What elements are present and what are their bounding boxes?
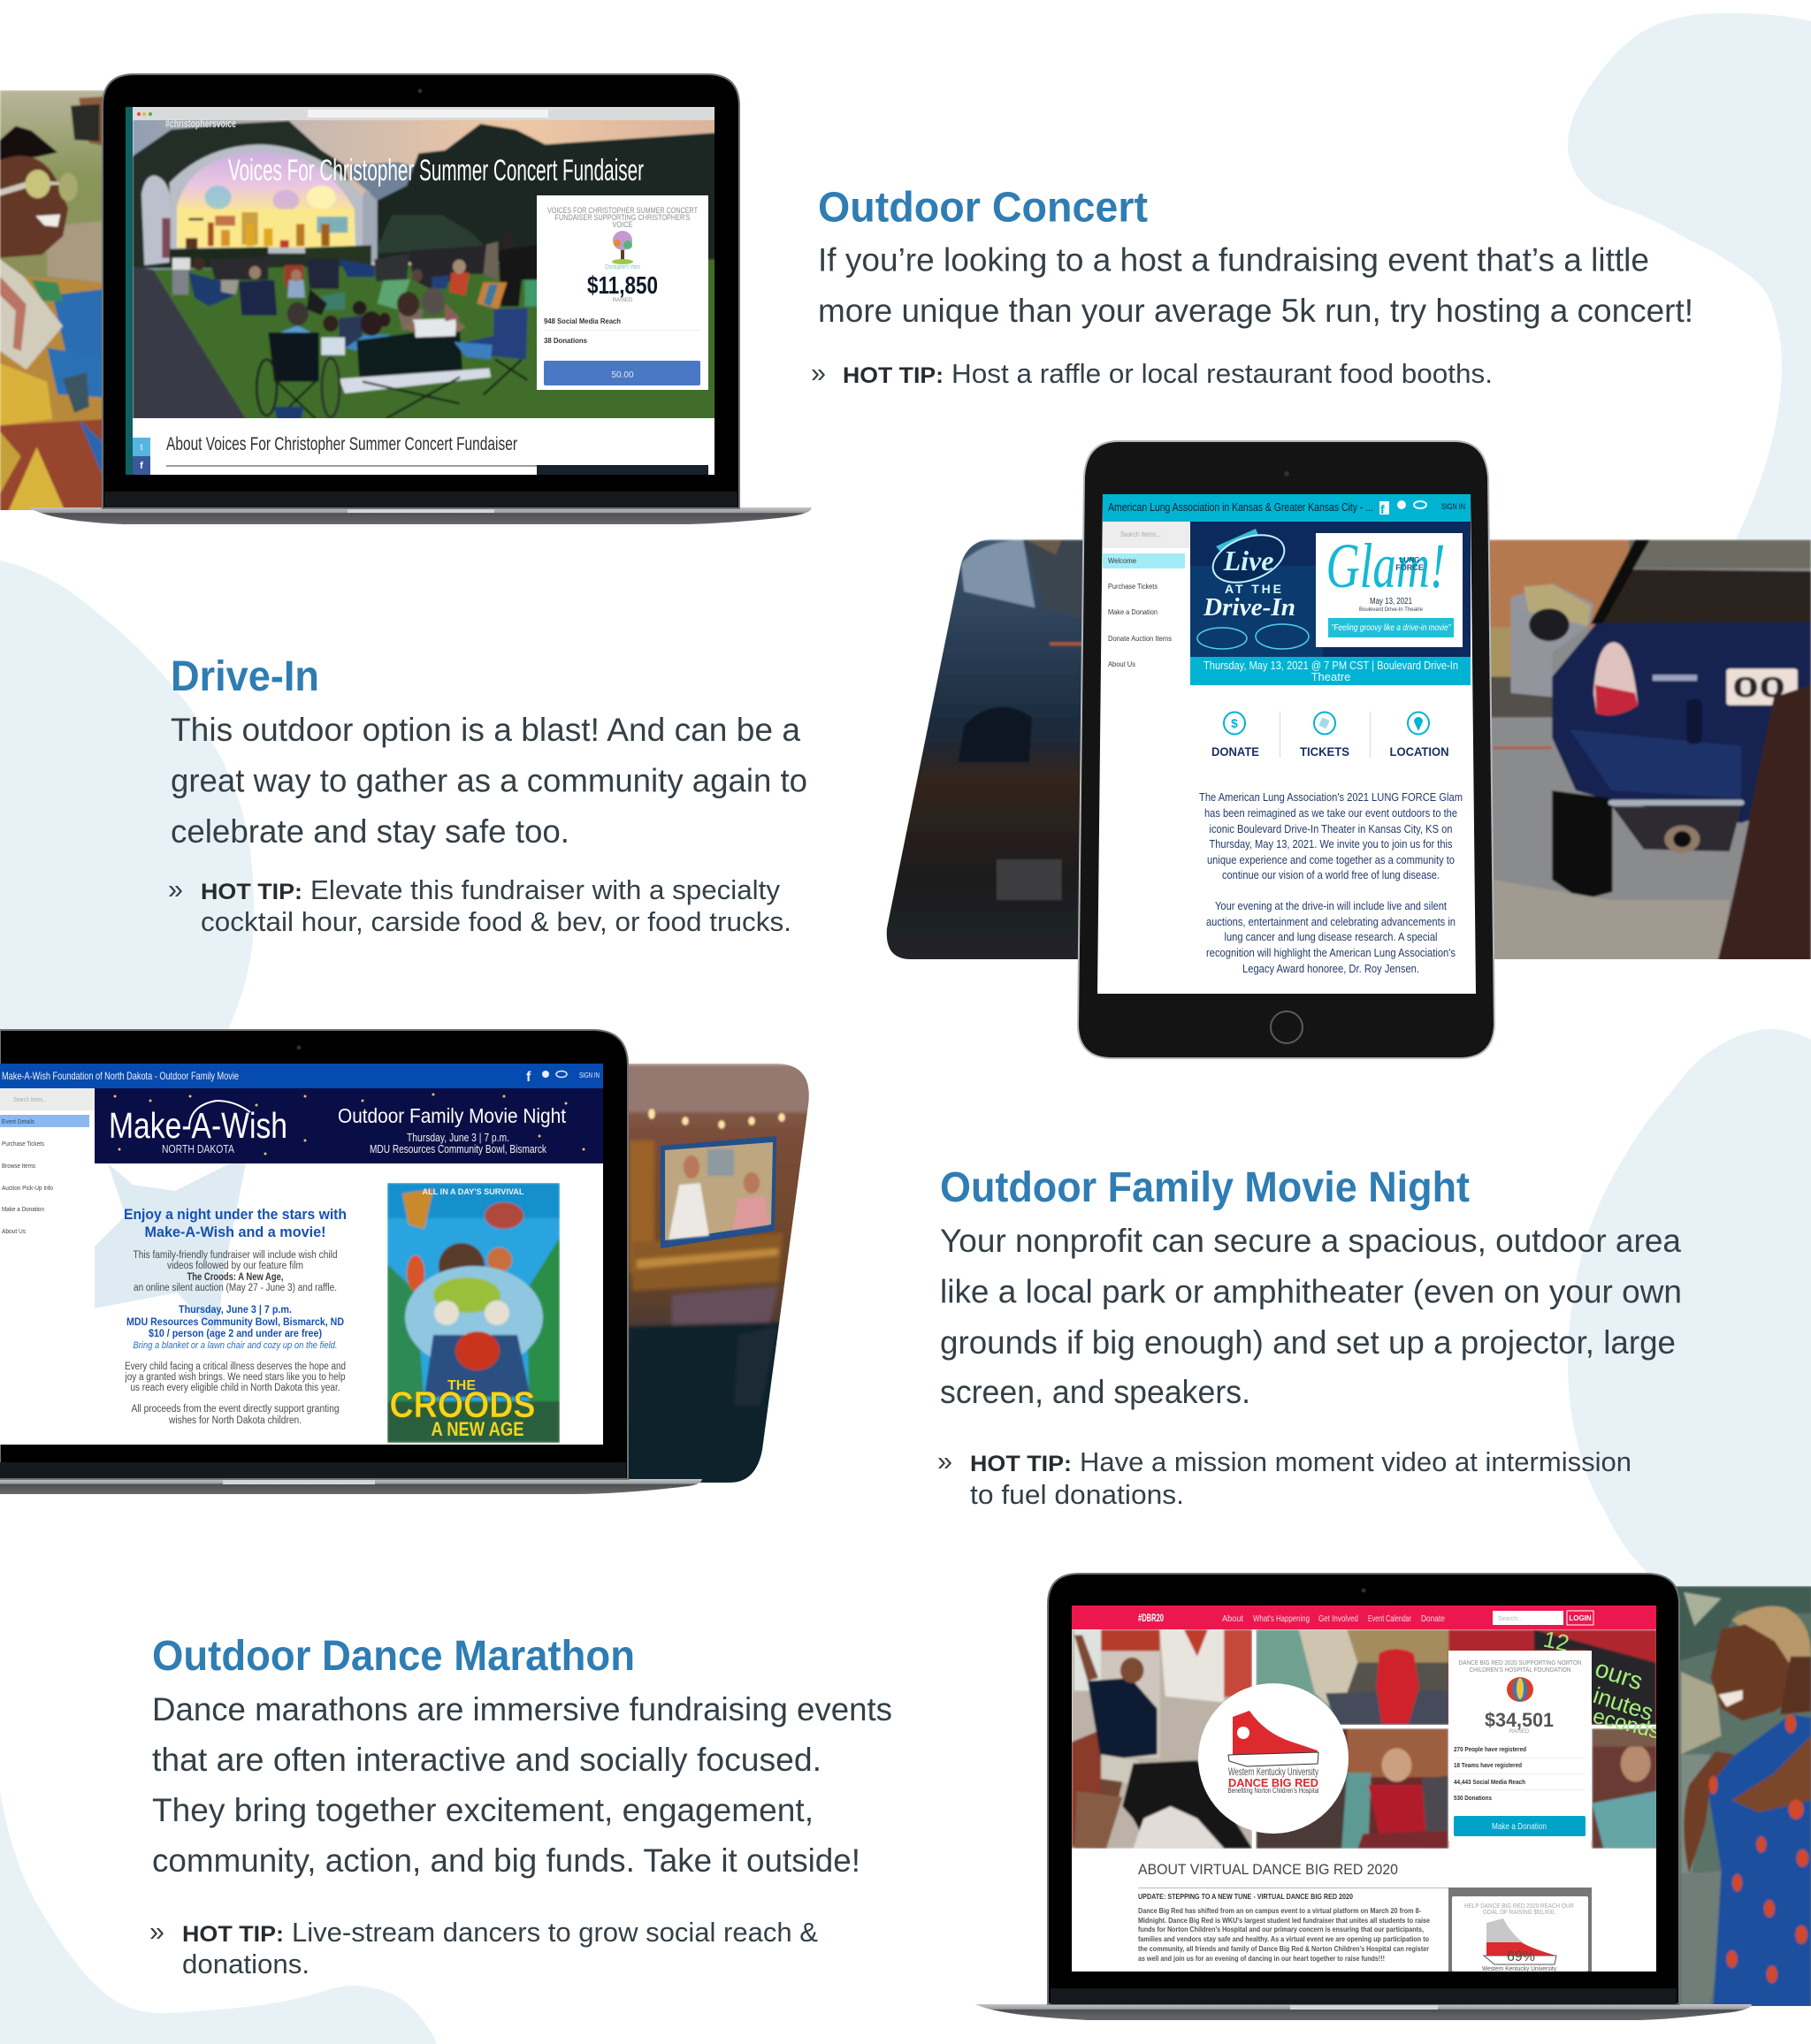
screen: lung association page: TICKETS bbox=[1300, 744, 1349, 759]
description text: iconic Boulevard Drive-In Theater in Kansas City, KS on bbox=[1210, 823, 1453, 835]
hot tip: cocktail hour, carside food & bev, or food trucks. bbox=[201, 907, 791, 937]
body bbox=[818, 240, 1693, 329]
event text: Thursday, June 3 | 7 p.m. bbox=[179, 1303, 292, 1316]
banner: AT THE bbox=[1225, 582, 1281, 596]
hot tip bbox=[149, 1917, 818, 1979]
body: Your nonprofit can secure a spacious, outdoor area bbox=[940, 1222, 1681, 1259]
screen: concert page bbox=[126, 107, 719, 475]
tablet: American Lung Association page bbox=[1078, 441, 1494, 1058]
body: This outdoor option is a blast! And can be a bbox=[171, 711, 800, 748]
screen: lung association page: Make a Donation bbox=[1108, 608, 1158, 616]
screen: Dance Big Red page: Donate bbox=[1421, 1614, 1445, 1624]
screen: make-a-wish page: SIGN IN bbox=[579, 1072, 600, 1079]
sidebar: Search Items... bbox=[13, 1097, 47, 1103]
donation card bbox=[537, 195, 708, 390]
screen: lung association page: Search Items... bbox=[1120, 530, 1161, 538]
collage hero: 12 bbox=[1541, 1626, 1571, 1657]
about section: HELP DANCE BIG RED 2020 REACH OUR bbox=[1464, 1903, 1574, 1910]
event text: MDU Resources Community Bowl, Bismarck, ND bbox=[126, 1316, 344, 1328]
donation card: 270 People have registered bbox=[1454, 1747, 1526, 1753]
banner: LUNG bbox=[1400, 556, 1419, 564]
text block: Drive-In bbox=[168, 653, 807, 937]
donation card: 38 Donations bbox=[544, 337, 588, 345]
sidebar: About Us bbox=[2, 1229, 26, 1235]
screen: Dance Big Red page: What's Happening bbox=[1253, 1614, 1310, 1624]
about section: UPDATE: STEPPING TO A NEW TUNE - VIRTUAL DANCE BIG RED 2020 bbox=[1138, 1892, 1353, 1901]
collage hero bbox=[1072, 1626, 1662, 1850]
watermark star bbox=[95, 1163, 246, 1335]
sidebar: Purchase Tickets bbox=[2, 1141, 44, 1148]
sidebar: Event Details bbox=[2, 1119, 34, 1125]
hot tip: » bbox=[811, 358, 826, 388]
laptop: Make-A-Wish movie night page bbox=[0, 1030, 702, 1494]
about section: GOAL OF RAISING $50,000. bbox=[1483, 1910, 1555, 1916]
description text: Legacy Award honoree, Dr. Roy Jensen. bbox=[1242, 963, 1419, 975]
screen: make-a-wish page: f bbox=[526, 1070, 531, 1085]
body: If you’re looking to a host a fundraising event that’s a little bbox=[818, 240, 1649, 278]
banner: Drive-In bbox=[1203, 594, 1295, 622]
left cell bbox=[1072, 1629, 1252, 1849]
screen: concert page: f bbox=[140, 461, 143, 471]
screen: Dance Big Red page: #DBR20 bbox=[1138, 1612, 1164, 1624]
hot tip: » bbox=[937, 1446, 952, 1476]
banner bbox=[95, 1088, 603, 1163]
photo: man in sunglasses taking a picture bbox=[0, 90, 105, 512]
background blob: middle left bbox=[0, 561, 254, 1032]
icon: donate: $ bbox=[1231, 716, 1238, 730]
photo: woman dancing in a blue dress bbox=[1673, 1586, 1811, 2008]
screen: lung association page: Donate Auction Items bbox=[1108, 635, 1172, 643]
screen: Dance Big Red page: Search... bbox=[1498, 1616, 1523, 1622]
screen: lung association page: Welcome bbox=[1108, 557, 1137, 565]
text block: Outdoor Concert bbox=[811, 184, 1693, 389]
donation card: 50.00 bbox=[611, 370, 634, 380]
about section: Dance Big Red has shifted from an on campus event to a virtual platform on March 20 from 8- bbox=[1138, 1907, 1421, 1915]
background blob: lower right bbox=[1568, 1029, 1811, 1587]
donation card: RAISED bbox=[1509, 1729, 1530, 1735]
photo: cars at a drive-in bbox=[884, 540, 1811, 962]
about section: ABOUT VIRTUAL DANCE BIG RED 2020 bbox=[1138, 1861, 1398, 1878]
about section: the community, all friends and family of Dance Big Red & Norton Children's Hospital can register bbox=[1138, 1945, 1429, 1953]
about heading: About Voices For Christopher Summer Concert Fundaiser bbox=[166, 434, 517, 454]
movie poster: THE bbox=[447, 1378, 476, 1393]
sidebar: Make a Donation bbox=[2, 1207, 44, 1213]
white circle logo: DANCE BIG RED bbox=[1228, 1776, 1318, 1789]
banner: FORCE bbox=[1395, 563, 1424, 572]
screen: make-a-wish page: Make-A-Wish Foundation of North Dakota - Outdoor Family Movie bbox=[2, 1070, 239, 1082]
icon: tickets bbox=[1314, 713, 1335, 734]
donation card: Make a Donation bbox=[1492, 1822, 1547, 1832]
banner: May 13, 2021 bbox=[1370, 597, 1412, 606]
movie poster: A NEW AGE bbox=[432, 1418, 523, 1440]
white circle logo: Western Kentucky University bbox=[1228, 1766, 1318, 1778]
description text: unique experience and come together as a community to bbox=[1207, 854, 1455, 866]
text block: Outdoor Family Movie Night bbox=[937, 1164, 1682, 1510]
event text: joy a granted wish brings. We need stars like you to help bbox=[125, 1372, 345, 1383]
screen: concert page: #christophersvoice bbox=[165, 117, 236, 130]
sidebar: Browse Items bbox=[2, 1163, 35, 1170]
white circle logo: Benefiting Norton Children's Hospital bbox=[1227, 1787, 1319, 1795]
about section: 69% bbox=[1507, 1949, 1535, 1964]
event text: wishes for North Dakota children. bbox=[168, 1415, 302, 1426]
body: community, action, and big funds. Take it outside! bbox=[152, 1842, 860, 1879]
body bbox=[940, 1222, 1682, 1410]
body: celebrate and stay safe too. bbox=[171, 812, 569, 850]
hot tip bbox=[168, 874, 791, 937]
screen: lung association page: DONATE bbox=[1211, 744, 1259, 759]
screen: lung association page: Theatre bbox=[1311, 670, 1350, 683]
donation card: $11,850 bbox=[587, 271, 658, 299]
photo: outdoor movie screen with string lights bbox=[623, 1064, 814, 1485]
donation card: RAISED bbox=[613, 298, 633, 303]
banner: Glam! bbox=[1326, 530, 1445, 601]
concert photo bbox=[133, 115, 719, 422]
event text: All proceeds from the event directly support granting bbox=[131, 1404, 340, 1415]
hot tip: HOT TIP: bbox=[201, 880, 302, 904]
body: like a local park or amphitheater (even on your own bbox=[940, 1273, 1682, 1310]
body bbox=[152, 1690, 892, 1879]
about section: Western Kentucky University bbox=[1482, 1966, 1556, 1972]
screen: lung association page: About Us bbox=[1108, 660, 1135, 668]
banner: Make-A-Wish bbox=[109, 1105, 287, 1146]
body: great way to gather as a community again to bbox=[171, 762, 807, 799]
description text: Thursday, May 13, 2021. We invite you to join us for this bbox=[1210, 838, 1452, 850]
donation card bbox=[1448, 1651, 1592, 1841]
hot tip: donations. bbox=[182, 1949, 309, 1979]
screen: lung association page: LOCATION bbox=[1390, 744, 1448, 759]
movie poster: ALL IN A DAY'S SURVIVAL bbox=[423, 1187, 524, 1196]
description text: has been reimagined as we take our event outdoors to the bbox=[1204, 807, 1457, 820]
icon: donate bbox=[1224, 713, 1245, 734]
body: that are often interactive and socially focused. bbox=[152, 1741, 821, 1778]
donation card: $34,501 bbox=[1485, 1709, 1554, 1731]
hot tip: HOT TIP: bbox=[182, 1922, 284, 1947]
screen: Dance Big Red page: LOGIN bbox=[1569, 1614, 1592, 1622]
crowd bbox=[172, 258, 190, 270]
hot tip bbox=[937, 1446, 1631, 1510]
screen: lung association page bbox=[1097, 494, 1476, 994]
heading: Outdoor Dance Marathon bbox=[152, 1633, 635, 1680]
about section bbox=[1138, 1861, 1592, 1972]
heading: Outdoor Concert bbox=[818, 184, 1148, 232]
banner: MDU Resources Community Bowl, Bismarck bbox=[370, 1143, 547, 1155]
body: They bring together excitement, engagement, bbox=[152, 1791, 814, 1828]
description text bbox=[1199, 791, 1463, 975]
donation card: 530 Donations bbox=[1454, 1796, 1492, 1802]
donation card: Christopher's Voice bbox=[605, 264, 640, 271]
description text: recognition will highlight the American Lung Association's bbox=[1206, 947, 1456, 959]
movie poster: CROODS bbox=[389, 1384, 536, 1425]
hot tip: » bbox=[168, 874, 183, 904]
about section: funds for Norton Children's Hospital and our primary concern is ensuring that our participants, bbox=[1138, 1926, 1424, 1933]
screen: make-a-wish page bbox=[0, 1064, 603, 1445]
event text bbox=[124, 1206, 347, 1426]
event text: $10 / person (age 2 and under are free) bbox=[149, 1327, 322, 1339]
banner: Thursday, June 3 | 7 p.m. bbox=[407, 1132, 509, 1144]
screen: Dance Big Red page: Get Involved bbox=[1318, 1614, 1358, 1624]
collage hero: inutes bbox=[1590, 1682, 1656, 1726]
description text: auctions, entertainment and celebrating advancements in bbox=[1206, 916, 1456, 928]
hot tip: » bbox=[149, 1917, 164, 1947]
sidebar bbox=[0, 1088, 95, 1235]
right cells bbox=[1448, 1629, 1657, 1725]
movie poster bbox=[387, 1183, 560, 1443]
heading: Drive-In bbox=[171, 653, 319, 700]
description text: continue our vision of a world free of lung disease. bbox=[1222, 869, 1440, 881]
collage hero: ours bbox=[1592, 1654, 1647, 1696]
about section: families and vendors stay safe and healthy. As a virtual event we are opening up participation to bbox=[1138, 1935, 1429, 1943]
background blob: top right bbox=[1568, 13, 1811, 540]
screen: concert page: t bbox=[141, 443, 143, 453]
description text: The American Lung Association's 2021 LUNG FORCE Glam bbox=[1199, 791, 1463, 804]
about section: Midnight. Dance Big Red is WKU's largest student led fundraiser that unites all students to raise bbox=[1138, 1917, 1430, 1925]
banner: Live bbox=[1223, 545, 1273, 576]
white circle logo bbox=[1198, 1683, 1349, 1834]
donation card: CHILDREN'S HOSPITAL FOUNDATION bbox=[1470, 1667, 1570, 1674]
laptop: Voices for Christopher concert page bbox=[28, 74, 812, 524]
event text: videos followed by our feature film bbox=[167, 1261, 303, 1271]
event text: Bring a blanket or a lawn chair and cozy up on the field. bbox=[133, 1340, 338, 1351]
screen: lung association page: f bbox=[1380, 502, 1385, 516]
sidebar: Auction Pick-Up Info bbox=[2, 1186, 53, 1192]
banner: Outdoor Family Movie Night bbox=[338, 1104, 567, 1127]
banner: NORTH DAKOTA bbox=[162, 1142, 234, 1155]
body: screen, and speakers. bbox=[940, 1373, 1250, 1410]
description text: Your evening at the drive-in will include live and silent bbox=[1215, 900, 1447, 912]
screen: lung association page: Purchase Tickets bbox=[1108, 583, 1158, 591]
background blob: bottom left bbox=[0, 1792, 437, 2044]
laptop: Dance Big Red page bbox=[975, 1574, 1752, 2020]
banner bbox=[1190, 522, 1471, 657]
donation card: FUNDAISER SUPPORTING CHRISTOPHER'S bbox=[555, 213, 690, 222]
hot tip: to fuel donations. bbox=[970, 1480, 1184, 1510]
hot tip: HOT TIP: bbox=[843, 363, 944, 388]
hot tip: HOT TIP: bbox=[970, 1452, 1072, 1476]
collage hero: econds bbox=[1591, 1705, 1662, 1744]
text block: Outdoor Dance Marathon bbox=[149, 1633, 892, 1979]
screen: lung association page: American Lung Association in Kansas & Greater Kansas City - ... bbox=[1108, 500, 1373, 514]
banner: "Feeling groovy like a drive-in movie" bbox=[1332, 623, 1451, 633]
screen: Dance Big Red page: About bbox=[1222, 1614, 1243, 1624]
body bbox=[171, 711, 807, 850]
event text: The Croods: A New Age, bbox=[187, 1272, 283, 1283]
photo: cars at a drive-in: 00 bbox=[1732, 672, 1785, 704]
screen: Dance Big Red page bbox=[1072, 1605, 1662, 1972]
banner: Boulevard Drive-In Theatre bbox=[1359, 607, 1424, 613]
heading: Outdoor Family Movie Night bbox=[940, 1164, 1470, 1211]
icon: location bbox=[1408, 713, 1429, 734]
body: more unique than your average 5k run, try hosting a concert! bbox=[818, 292, 1693, 329]
donation card: 44,443 Social Media Reach bbox=[1454, 1780, 1525, 1786]
event text: Enjoy a night under the stars with bbox=[124, 1206, 347, 1223]
screen: Dance Big Red page: Event Calendar bbox=[1368, 1614, 1411, 1624]
event text: Make-A-Wish and a movie! bbox=[145, 1224, 325, 1240]
about section: as well and join us for an evening of dancing in our heart together to raise funds!!! bbox=[1138, 1955, 1385, 1963]
event text: an online silent auction (May 27 - June 3) and raffle. bbox=[134, 1283, 337, 1293]
hot tip: Have a mission moment video at intermission bbox=[1080, 1447, 1631, 1477]
donation card: VOICE bbox=[612, 220, 633, 229]
body: Dance marathons are immersive fundraising events bbox=[152, 1690, 892, 1727]
screen: lung association page: Thursday, May 13, 2021 @ 7 PM CST | Boulevard Drive-In bbox=[1204, 659, 1458, 672]
middle bottom cell bbox=[1256, 1728, 1448, 1849]
hot tip: Live-stream dancers to grow social reach & bbox=[292, 1918, 818, 1948]
event text: us reach every eligible child in North Dakota this year. bbox=[131, 1383, 340, 1393]
hot tip: Elevate this fundraiser with a specialty bbox=[310, 875, 781, 905]
page title: Voices For Christopher Summer Concert Fundaiser bbox=[228, 154, 644, 187]
donation card: 18 Teams have registered bbox=[1454, 1763, 1522, 1769]
donation card: VOICES FOR CHRISTOPHER SUMMER CONCERT bbox=[547, 206, 698, 215]
middle top cell bbox=[1364, 1629, 1448, 1690]
screen: lung association page: SIGN IN bbox=[1441, 502, 1465, 511]
donation card: DANCE BIG RED 2020 SUPPORTING NORTON bbox=[1459, 1660, 1581, 1666]
event text: This family-friendly fundraiser will include wish child bbox=[133, 1250, 338, 1261]
hot tip: Host a raffle or local restaurant food booths. bbox=[951, 359, 1493, 389]
event text: Every child facing a critical illness deserves the hope and bbox=[125, 1361, 346, 1372]
body: grounds if big enough) and set up a projector, large bbox=[940, 1323, 1676, 1361]
donation card: 948 Social Media Reach bbox=[544, 317, 621, 325]
description text: lung cancer and lung disease research. A special bbox=[1224, 931, 1438, 943]
